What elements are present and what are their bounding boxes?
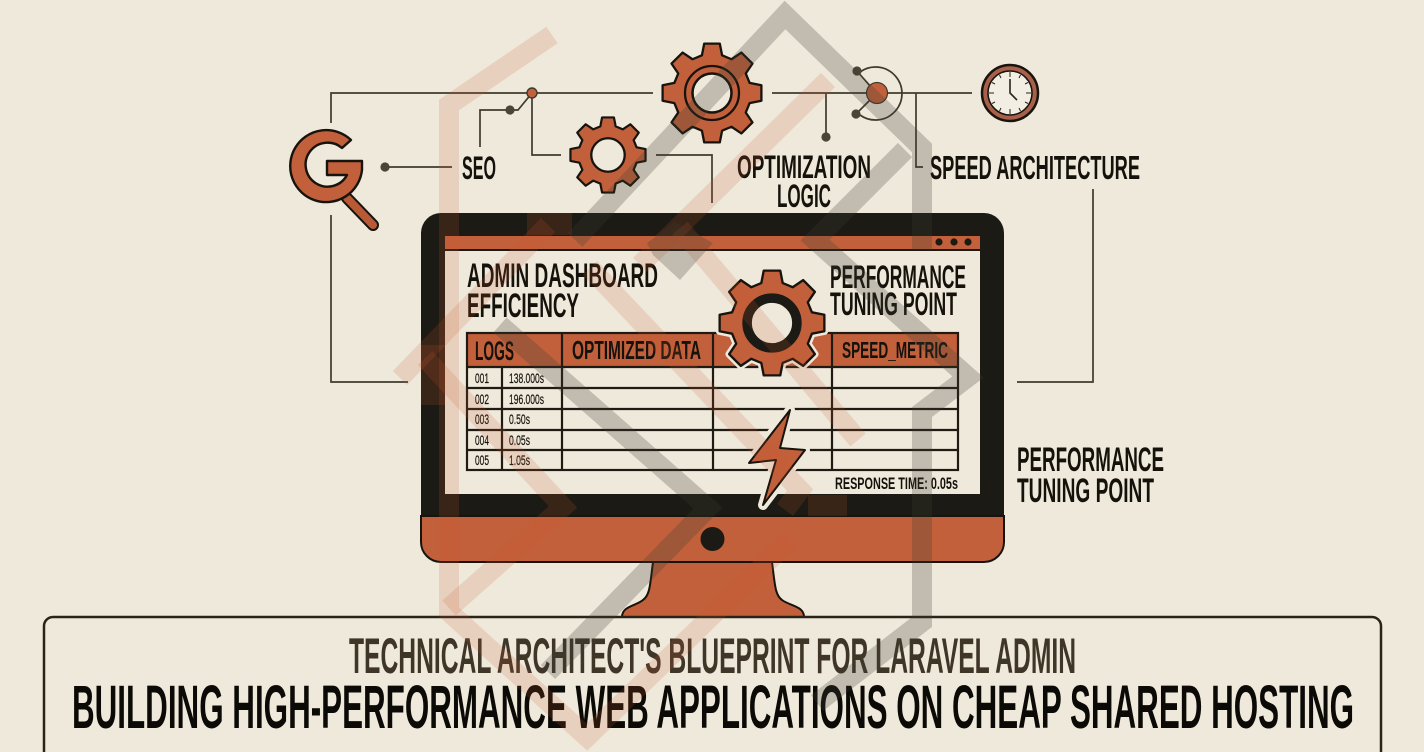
monitor stand — [622, 562, 804, 617]
monitor body — [421, 213, 1004, 562]
monitor — [421, 213, 1004, 617]
table header labels: LOGS — [475, 336, 514, 366]
icon: small gear — [570, 117, 646, 193]
icon: network hub — [851, 66, 902, 120]
performance tuning heading in screen: TUNING POINT — [830, 286, 957, 322]
icon: large gear — [663, 44, 761, 142]
label: performance tuning point — [1017, 441, 1164, 510]
performance tuning heading in screen — [830, 259, 966, 322]
icon: clock — [982, 65, 1038, 121]
table header labels: SPEED_METRIC — [842, 337, 948, 363]
title panel — [44, 617, 1381, 752]
window title bar — [445, 236, 980, 251]
table rows: 003 — [475, 411, 489, 427]
table rows: 196.000s — [509, 391, 544, 407]
label: SEO: SEO — [462, 150, 496, 186]
table rows: 138.000s — [509, 370, 544, 386]
label: optimization logic: OPTIMIZATION — [737, 149, 871, 185]
dashboard heading: ADMIN DASHBOARD — [467, 257, 658, 295]
watermark: overlapping hexagon logo — [400, 15, 968, 737]
dashboard heading — [467, 257, 658, 325]
dashboard heading: EFFICIENCY — [467, 287, 579, 325]
table rows: 002 — [475, 391, 489, 407]
icon: Google G magnifier — [290, 130, 373, 225]
label: performance tuning point: PERFORMANCE — [1017, 441, 1164, 479]
data table — [467, 333, 958, 470]
table rows: 0.05s — [509, 432, 530, 448]
table rows — [475, 370, 544, 468]
table rows: 004 — [475, 432, 489, 448]
label: optimization logic: LOGIC — [777, 178, 831, 214]
table rows: 1.05s — [509, 452, 530, 468]
table header labels: OPTIMIZED DATA — [572, 335, 701, 365]
icon: performance gear on screen — [720, 271, 824, 375]
icon: lightning bolt — [749, 410, 805, 505]
table rows: 005 — [475, 452, 489, 468]
camera — [700, 527, 724, 551]
table header labels — [475, 335, 948, 366]
response time note: RESPONSE TIME: 0.05s — [835, 474, 958, 493]
label: performance tuning point: TUNING POINT — [1017, 472, 1154, 510]
connector lines — [331, 88, 1093, 382]
label: speed architecture: SPEED ARCHITECTURE — [930, 149, 1140, 186]
label: optimization logic — [737, 149, 871, 214]
screen — [445, 250, 980, 494]
table rows: 0.50s — [509, 411, 530, 427]
table rows: 001 — [475, 370, 489, 386]
performance tuning heading in screen: PERFORMANCE — [830, 259, 966, 295]
monitor chin — [421, 516, 1004, 562]
